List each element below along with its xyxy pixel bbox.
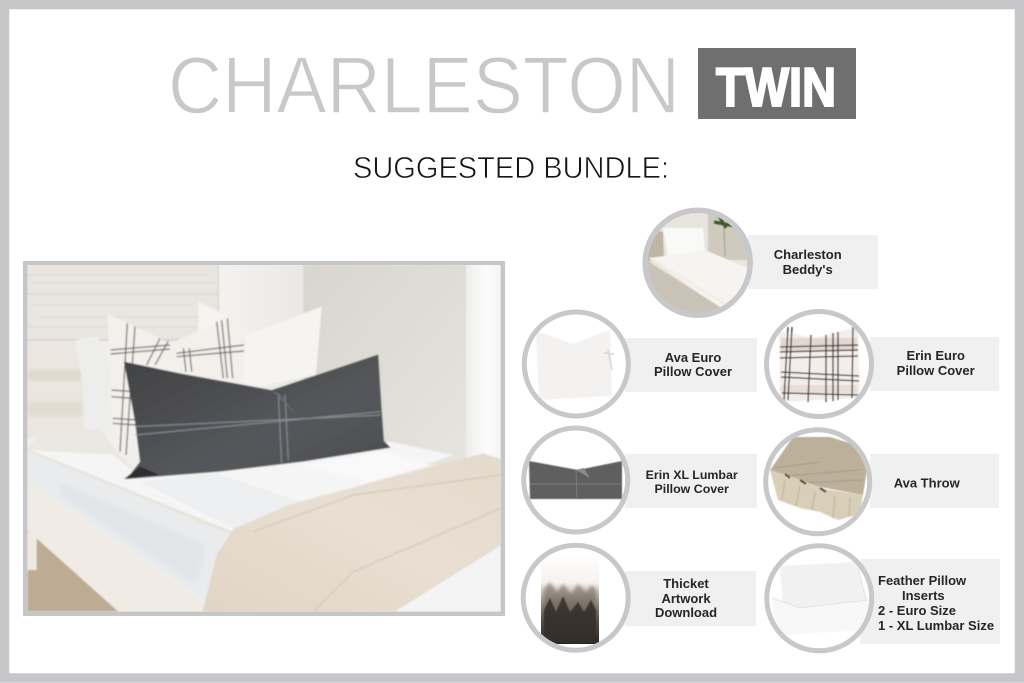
- label bar: [625, 454, 757, 508]
- sheet top: [27, 428, 233, 532]
- item: Feather Pillow Inserts: [767, 546, 1000, 651]
- ring: [524, 428, 628, 532]
- item: Charleston Beddy's: [640, 210, 878, 322]
- label text: Erin Euro: [906, 348, 965, 363]
- ring: [645, 210, 750, 315]
- label bar: [870, 454, 999, 508]
- label text: Ava Euro: [665, 350, 721, 365]
- item: Ava Throw: [766, 430, 999, 534]
- ring: [523, 545, 628, 650]
- mattress side: [27, 452, 233, 602]
- item: Thicket Artwork Download: [520, 545, 756, 650]
- image: leather lumbar pillow: [525, 429, 627, 531]
- image: foggy forest print: [541, 568, 626, 644]
- label text: Beddy's: [783, 262, 833, 277]
- left white pillow: [75, 338, 100, 384]
- label text: Erin XL Lumbar: [646, 468, 738, 482]
- duvet: [27, 442, 453, 532]
- ring: [767, 546, 872, 651]
- panel: bed photo: [20, 255, 520, 622]
- label text: 2 - Euro Size: [878, 603, 956, 618]
- label bar: [870, 337, 999, 391]
- beige throw blanket: [203, 453, 501, 612]
- item: Erin Euro Pillow Cover: [766, 312, 999, 416]
- ring: [524, 312, 628, 416]
- item: Ava Euro Pillow Cover: [524, 312, 757, 416]
- headboard: [20, 262, 219, 438]
- image: white pillow: [536, 330, 626, 400]
- back white euro pillow: [198, 302, 322, 388]
- floor: [27, 530, 118, 612]
- label bar: [860, 559, 1000, 644]
- label text: Pillow Cover: [654, 364, 732, 379]
- image: zipper bed: [648, 213, 748, 312]
- label text: Feather Pillow: [878, 573, 967, 588]
- label bar: [748, 235, 878, 289]
- bed leg: [28, 531, 38, 571]
- image: tasseled throw: [770, 436, 866, 520]
- title: Charleston: CHARLESTON: [168, 41, 680, 131]
- frame: [27, 482, 210, 612]
- label text: Ava Throw: [894, 476, 961, 491]
- ring: [766, 430, 870, 534]
- badge: Twin: TWIN: [716, 56, 836, 118]
- wall and window backdrop: [27, 265, 501, 612]
- label bar: [625, 571, 756, 626]
- label text: Thicket: [663, 576, 709, 591]
- label text: Pillow Cover: [897, 363, 975, 378]
- image: white inserts: [772, 562, 869, 634]
- ring: [766, 312, 872, 416]
- plaid pillow: [107, 311, 247, 455]
- label text: 1 - XL Lumbar Size: [878, 618, 994, 633]
- label text: Charleston: [774, 247, 842, 262]
- label bar: [625, 338, 757, 392]
- image: plaid pillow: [779, 326, 860, 403]
- item: Erin XL Lumbar Pillow Cover: [524, 428, 757, 532]
- label text: Artwork: [661, 591, 711, 606]
- label text: Inserts: [902, 588, 945, 603]
- label text: Pillow Cover: [655, 482, 729, 496]
- subtitle: Suggested bundle: SUGGESTED BUNDLE:: [353, 150, 669, 185]
- lower duvet corner: [395, 546, 501, 612]
- leather lumbar pillow: [124, 354, 391, 479]
- label text: Download: [655, 605, 717, 620]
